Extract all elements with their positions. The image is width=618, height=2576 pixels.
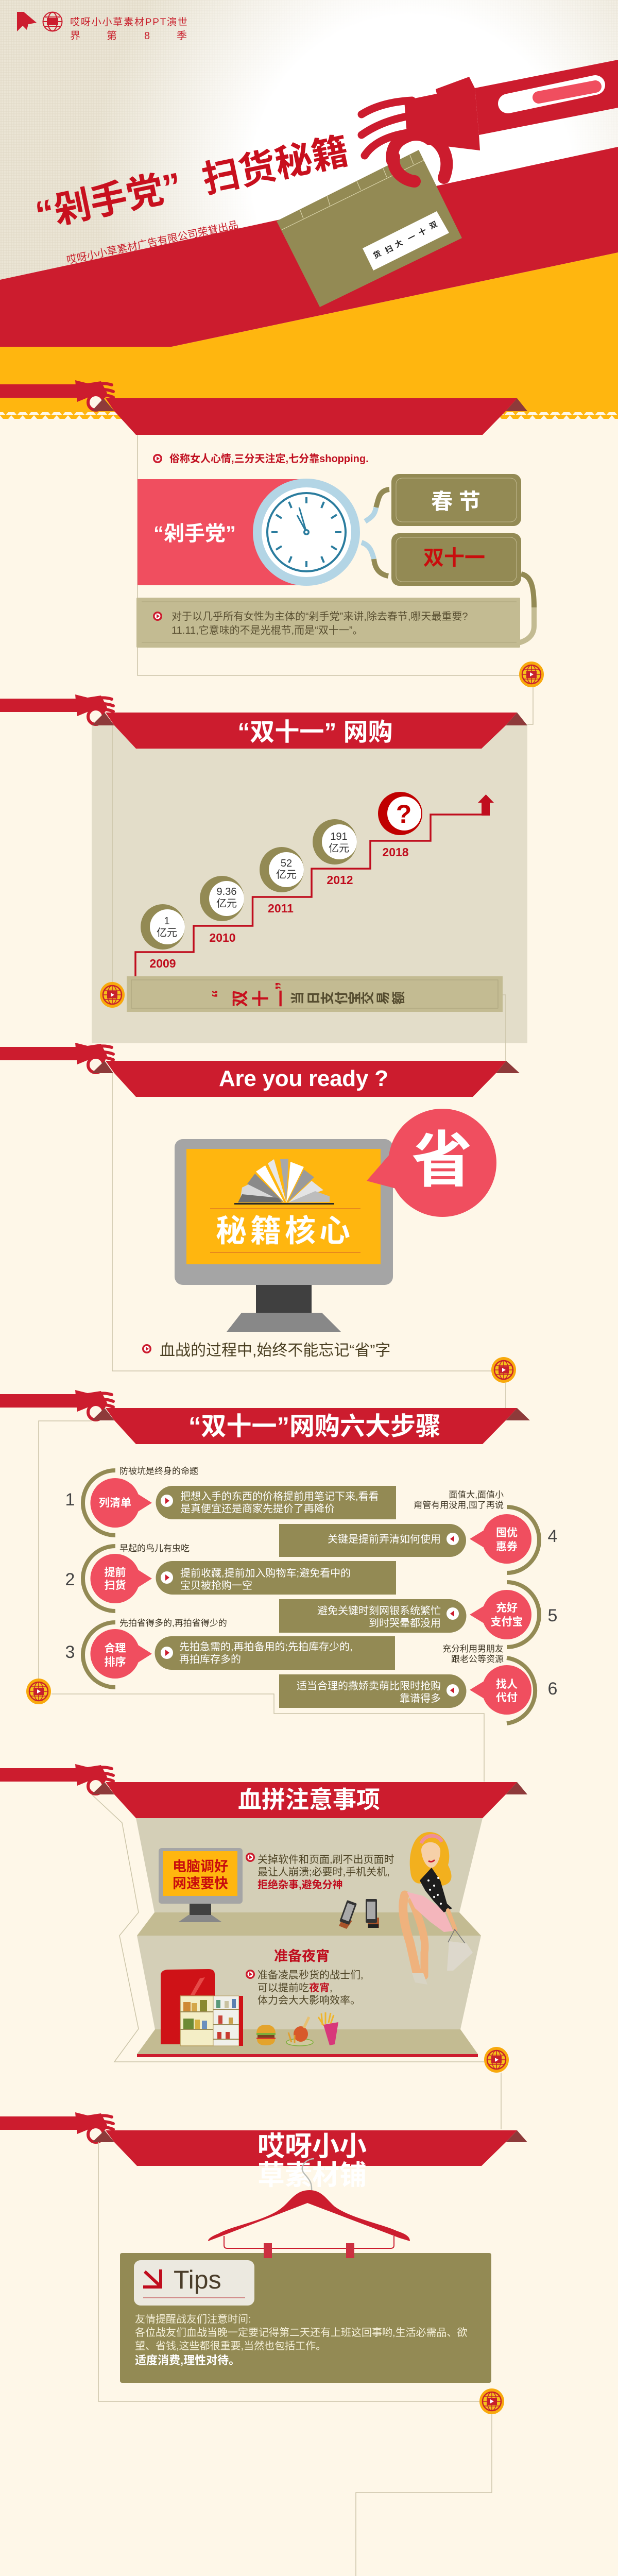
stand (256, 1285, 312, 1313)
step 5: 充好 (496, 1602, 518, 1614)
tips badge (134, 2260, 254, 2306)
clock (253, 479, 360, 586)
rotated caption text: “ (209, 989, 228, 998)
tip text: midnight snack: 体力会大大影响效率。 (258, 1994, 360, 2006)
step 6: 跟老公等资源 (451, 1654, 504, 1664)
medallion 4 (26, 1679, 51, 1704)
year labels: 2012 (327, 873, 353, 887)
tips badge: Tips (174, 2265, 221, 2294)
tips text: 望、省钱,这些都很重要,当然也包括工作。 (135, 2340, 326, 2352)
arm (448, 1910, 455, 1929)
handbag (447, 1929, 473, 1971)
screen (186, 1149, 381, 1264)
2009 value: 亿元 (157, 927, 177, 939)
brand text: 第 (107, 30, 117, 42)
step 5: 到时哭晕都没用 (369, 1617, 441, 1629)
rotated caption text: 双十一 (231, 990, 290, 1007)
hook (302, 2159, 314, 2191)
step 6: 6 (548, 1679, 557, 1699)
hair (410, 1832, 452, 1886)
tip text: midnight snack: 可以提前吃夜宵, (258, 1981, 333, 1994)
tip text: focus (246, 1853, 394, 1891)
section 4 frame lines (39, 1421, 484, 1782)
step 6: 靠谱得多 (400, 1692, 441, 1704)
step 1: 列清单 (99, 1497, 131, 1509)
monitor body (175, 1139, 393, 1285)
bar (224, 2236, 394, 2248)
step 4: 甭管有用没用,囤了再说 (414, 1500, 504, 1510)
step 4: 囤优 (496, 1527, 518, 1539)
section 4 heading ribbon (0, 1390, 530, 1444)
step 5: 支付宝 (490, 1616, 523, 1628)
brand text (70, 16, 187, 42)
medallion 1 (519, 662, 544, 687)
main title: “剁手党” (32, 165, 185, 236)
icon: fries (318, 2012, 338, 2045)
step 1: 是真便宜还是商家先提价了再降价 (180, 1503, 335, 1515)
medallion 2 (100, 982, 125, 1008)
step 4: 4 (548, 1527, 557, 1546)
box: double eleven (391, 533, 521, 586)
2018 unknown value (378, 792, 422, 835)
arrow (478, 794, 494, 816)
red diagonal band (0, 147, 618, 347)
stair chart (135, 792, 494, 977)
brand text: 8 (144, 30, 150, 42)
step 5: 避免关键时刻网银系统繁忙 (317, 1605, 441, 1617)
brand text: 界 (70, 30, 80, 42)
icon: burger (256, 2025, 276, 2045)
heading: 血拼注意事项 (238, 1786, 380, 1813)
step 6: 适当合理的撒娇卖萌比限时抢购 (297, 1680, 441, 1692)
brand text: 季 (177, 30, 187, 42)
tip text: midnight snack: 准备凌晨秒货的战士们, (258, 1969, 364, 1981)
step 4 (279, 1490, 557, 1573)
heading: “双十一” 网购 (237, 719, 393, 746)
clips (264, 2243, 272, 2258)
hanger body (208, 2190, 410, 2241)
step 2: 2 (65, 1570, 75, 1589)
2012 value (313, 819, 357, 865)
face (421, 1842, 440, 1868)
logo: globe (43, 12, 62, 31)
step 3 (65, 1618, 395, 1687)
illustration: woman (403, 1832, 473, 1985)
2018 unknown value: ? (396, 800, 411, 828)
speech bubble: 省 (411, 1127, 472, 1195)
2010 value: 9.36 (217, 886, 236, 897)
2011 value (260, 847, 304, 892)
main title (32, 130, 352, 236)
section 3 frame lines (112, 1073, 506, 1408)
legs (403, 1895, 417, 1974)
rotated caption text (209, 982, 406, 1007)
section 6 frame lines (98, 2142, 492, 2576)
medallion 6 (479, 2388, 504, 2414)
step 6: 找人 (496, 1679, 518, 1690)
year labels: 2018 (382, 845, 409, 859)
section 2 panel background (92, 725, 527, 1043)
skirt (407, 1892, 453, 1932)
tip text: focus: 最让人崩溃;必要时,手机关机, (258, 1866, 390, 1878)
big hand (362, 60, 618, 178)
heading line 1: 哎呀小小 (258, 2131, 367, 2162)
pink band (138, 479, 307, 585)
section 5 frame outline (92, 1794, 501, 2129)
2012 value: 亿元 (329, 842, 349, 854)
2011 value: 亿元 (276, 869, 297, 880)
box: spring festival (391, 474, 521, 526)
step 3: 再拍库存多的 (179, 1653, 241, 1665)
small monitor tip: 电脑调好 (173, 1859, 228, 1874)
section 3 bullet text: 血战的过程中,始终不能忘记“省”字 (160, 1342, 390, 1359)
tips text: 适度消费,理性对待。 (135, 2354, 240, 2367)
medallion 5 (484, 2047, 509, 2073)
step 2: 提前 (104, 1567, 126, 1579)
tip text: focus: 拒绝杂事,避免分神 (258, 1878, 343, 1891)
intro sentence: 俗称女人心情,三分天注定,七分靠shopping. (169, 452, 369, 465)
heading: Are you ready ? (219, 1066, 388, 1091)
stair line (135, 815, 487, 977)
logo: red star flag (17, 12, 37, 31)
step 1 (65, 1466, 396, 1535)
illustration: fridge (161, 1969, 243, 2046)
section 1 frame line (138, 435, 533, 724)
yellow band (0, 252, 618, 419)
year labels: 2009 (149, 957, 176, 970)
small monitor tip (159, 1848, 243, 1922)
icon: hands with phones (339, 1899, 379, 1929)
step 2: 早起的鸟儿有虫吃 (119, 1544, 190, 1553)
tips text: 友情提醒战友们注意时间: (135, 2313, 251, 2325)
step 3: 先拍急需的,再拍备用的;先拍库存少的, (179, 1641, 353, 1653)
icon: hanger (208, 2159, 410, 2258)
step 2 (65, 1544, 396, 1611)
2012 value: 191 (330, 831, 348, 842)
section 2 heading ribbon (0, 694, 527, 749)
rotated caption text: 当日支付宝交易额 (290, 991, 406, 1005)
section 6 heading ribbon (0, 2112, 527, 2191)
2010 value: 亿元 (216, 897, 237, 909)
tips text (135, 2313, 468, 2367)
subtitle: 哎呀小小草素材广告有限公司荣誉出品 (65, 219, 239, 266)
box: spring festival: 春 节 (431, 489, 480, 514)
heading line 2: 草素材铺 (258, 2160, 367, 2191)
step 6: 代付 (496, 1692, 518, 1704)
step 1: 1 (65, 1490, 75, 1510)
year labels (149, 845, 409, 970)
step 4: 关键是提前弄清如何使用 (328, 1533, 441, 1545)
step 1: 把想入手的东西的价格提前用笔记下来,看看 (180, 1490, 379, 1502)
shoes (412, 1973, 427, 1985)
box: double eleven: 双十一 (423, 547, 485, 569)
small monitor tip: 网速要快 (173, 1876, 228, 1891)
tips text: 各位战友们血战当晚一定要记得第二天还有上班这回事哟,生活必需品、欲 (135, 2327, 468, 2338)
icon: open book (234, 1159, 334, 1205)
data caption bar (127, 976, 503, 1012)
step 3: 3 (65, 1642, 75, 1662)
pink band label: “剁手党” (153, 522, 236, 545)
step 5 (279, 1582, 557, 1647)
rules (210, 1209, 360, 1252)
2011 value: 52 (281, 858, 292, 869)
section 1: hand and ribbon (0, 380, 527, 435)
bullet (153, 454, 162, 463)
main title: 扫货秘籍 (199, 130, 352, 201)
section 1 panel (136, 452, 534, 648)
heading: “双十一”网购六大步骤 (188, 1413, 441, 1440)
step 1: 防被坑是终身的命题 (119, 1466, 198, 1476)
step 3: 先拍省得多的,再拍省得少的 (119, 1618, 227, 1628)
explanation panel: 对于以几乎所有女性为主体的“剁手党”来讲,除去春节,哪天最重要? (171, 611, 468, 622)
tag label: 双十一大扫货 (372, 220, 439, 261)
step 2: 扫货 (104, 1579, 126, 1591)
brand text: 哎呀小小草素材PPT演世 (70, 16, 187, 28)
2009 value: 1 (164, 916, 170, 927)
step 2: 宝贝被抢购一空 (180, 1580, 252, 1591)
connectors (362, 489, 534, 643)
rotated caption text: ” (272, 982, 291, 990)
dress (420, 1868, 452, 1912)
2009 value (141, 904, 185, 950)
core label: 秘籍核心 (216, 1214, 354, 1248)
step 6: 充分利用男朋友 (442, 1644, 504, 1654)
step 3: 合理 (104, 1642, 126, 1654)
2010 value (200, 876, 244, 921)
medallion 3 (491, 1357, 516, 1383)
monitor with secret core (175, 1139, 393, 1332)
finger over tag (393, 157, 415, 181)
header cover panel (0, 0, 618, 419)
tip text: focus: 关掉软件和页面,刷不出页面时 (258, 1854, 394, 1866)
year labels: 2010 (209, 931, 236, 944)
tips panel (120, 2253, 491, 2383)
section 2 frame lines (112, 725, 506, 1061)
explanation panel: 11.11,它意味的不是光棍节,而是“双十一”。 (171, 624, 363, 636)
section 5 shelves (136, 1818, 483, 2057)
icon: roast chicken (286, 2017, 313, 2046)
speech bubble (367, 1109, 496, 1217)
step 2: 提前收藏,提前加入购物车;避免看中的 (180, 1567, 351, 1579)
book tag (277, 150, 462, 307)
section 3 heading ribbon (0, 1043, 520, 1097)
explanation panel (136, 598, 520, 648)
step 4: 惠券 (496, 1541, 518, 1553)
year labels: 2011 (268, 902, 294, 915)
watch pill on arm (508, 85, 595, 104)
tip text: midnight snack (246, 1969, 364, 2006)
step 3: 排序 (104, 1656, 126, 1668)
section 5 heading ribbon (0, 1764, 527, 1818)
step 4: 面值大,面值小 (449, 1490, 504, 1500)
step 5: 5 (548, 1606, 557, 1625)
headband (421, 1836, 442, 1843)
heading: midnight snack: 准备夜宵 (274, 1948, 330, 1964)
step 6 (279, 1644, 557, 1723)
